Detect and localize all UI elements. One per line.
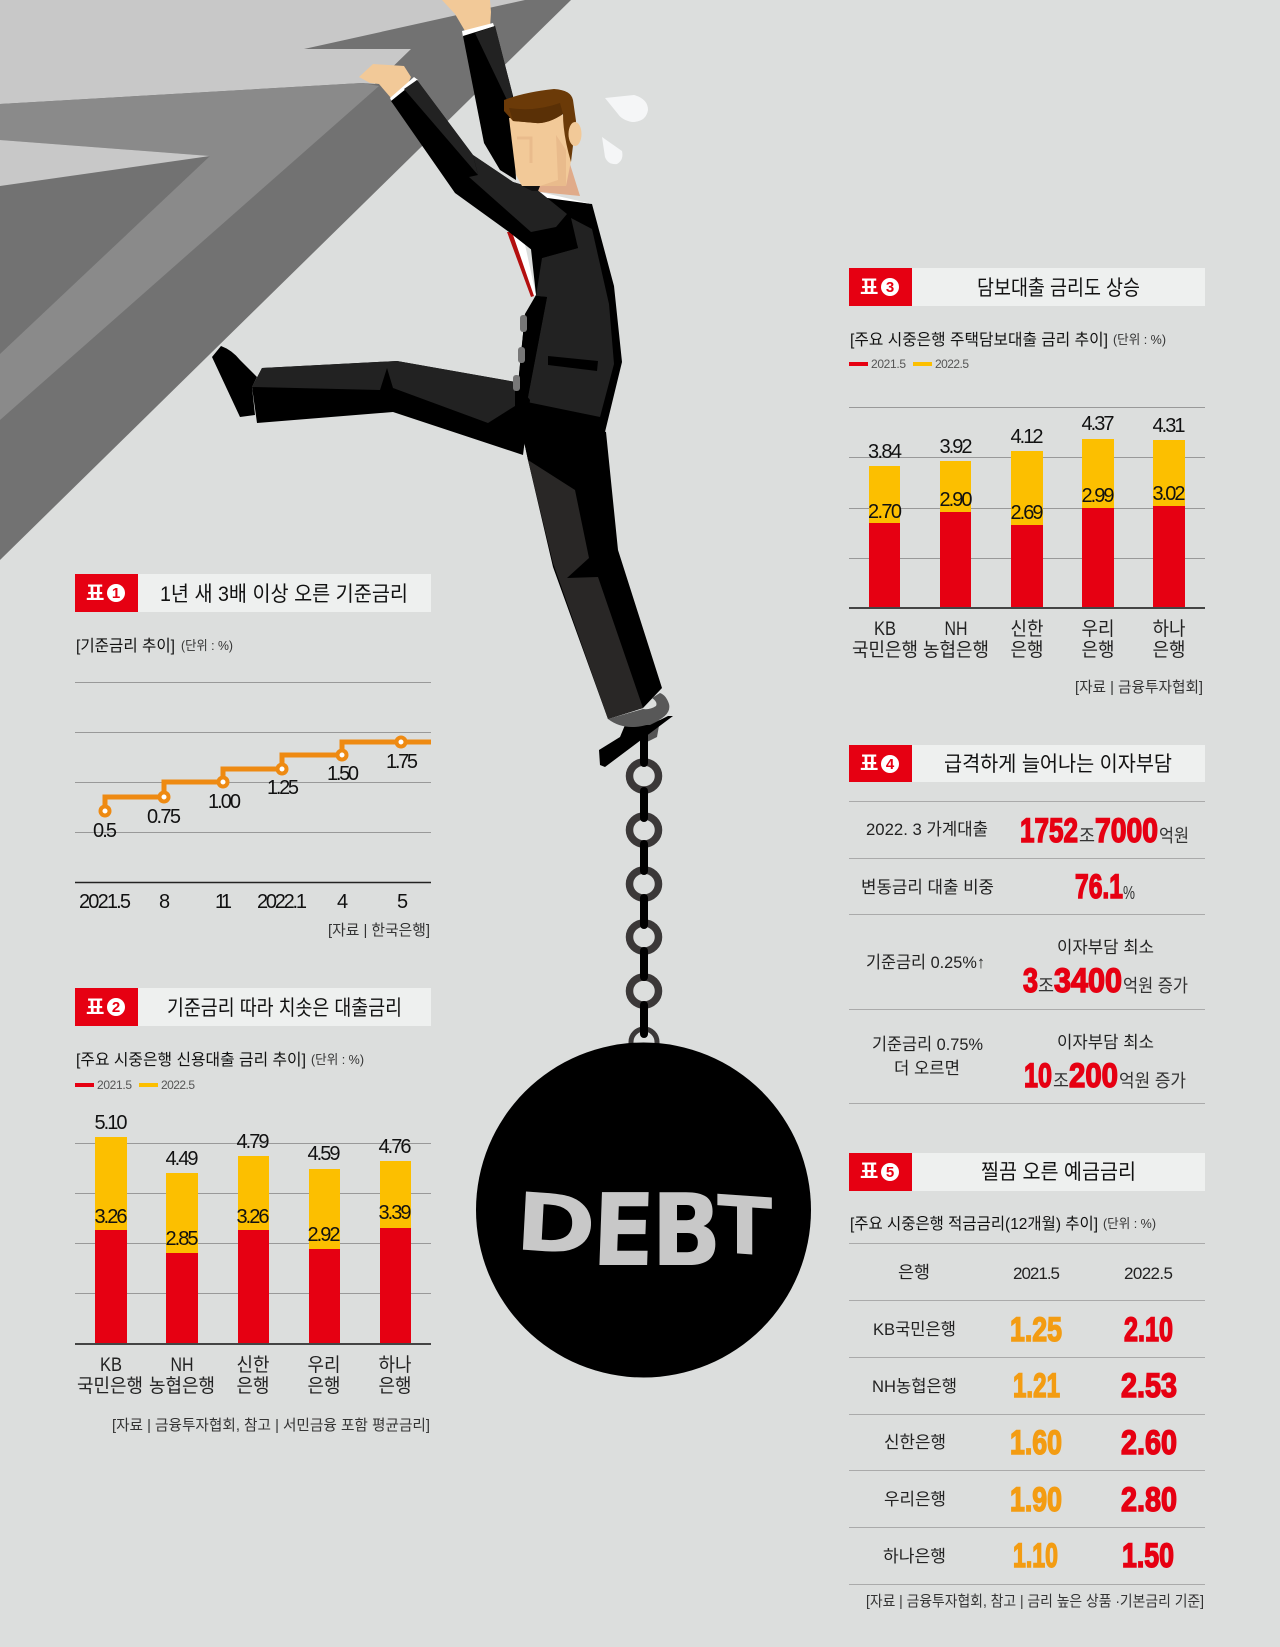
stacked bar chart: 4.49 <box>166 1148 198 1170</box>
row: household debt: 1752 <box>1020 812 1078 850</box>
illustration: businessman hanging <box>212 0 673 767</box>
subtitle: [주요 시중은행 주택담보대출 금리 추이] <box>850 331 1108 349</box>
stacked bar chart: NH <box>170 1355 194 1376</box>
stacked bar chart: 2.90 <box>940 489 972 511</box>
source: [자료 | 금융투자협회] <box>1075 679 1203 696</box>
subtitle: (단위 : %) <box>1103 1216 1156 1231</box>
stacked bar chart: 2.85 <box>166 1228 198 1250</box>
stacked bar chart: 농협은행 <box>923 639 989 661</box>
hanging leg <box>516 404 662 719</box>
stacked bar chart: 3.39 <box>378 1202 412 1224</box>
subtitle: [기준금리 추이] <box>76 637 175 655</box>
panel 4: interest burden <box>849 745 1205 1104</box>
stacked bar chart: 우리 <box>1082 618 1114 640</box>
line chart: 1.50 <box>327 763 359 785</box>
stacked bar chart: 2.69 <box>1010 502 1044 524</box>
stacked bar chart: 4.59 <box>308 1143 340 1165</box>
stacked bar chart: 은행 <box>1152 639 1186 661</box>
heading: 3 <box>886 279 894 296</box>
wrecking ball with DEBT label <box>476 1042 811 1378</box>
row: base rate up 0.75: 조 <box>1053 1071 1069 1091</box>
legend: 2021.5 <box>97 1078 132 1092</box>
line chart: 4 <box>337 891 348 913</box>
table rows: 1.50 <box>1122 1537 1174 1575</box>
stacked bar chart: 농협은행 <box>149 1375 215 1397</box>
row: base rate up 0.25: 이자부담 최소 <box>1057 938 1154 957</box>
foot, cuff and shackle <box>599 693 673 767</box>
heading: 4 <box>886 756 895 773</box>
panel 3: mortgage rates <box>849 268 1205 696</box>
table header: 2021.5 <box>1013 1264 1060 1283</box>
table rows: 1.60 <box>1010 1424 1062 1462</box>
wrecking ball with DEBT label: B <box>651 1172 722 1289</box>
heading <box>849 268 1205 306</box>
row: base rate up 0.75 <box>872 1033 1186 1095</box>
line chart: 1.00 <box>208 791 241 813</box>
stacked bar chart: 은행 <box>308 1375 340 1397</box>
stacked bar chart: 국민은행 <box>77 1375 143 1397</box>
stacked bar chart: 2.70 <box>868 501 902 523</box>
heading: 1 <box>112 585 120 602</box>
table rows: 2.10 <box>1124 1311 1173 1349</box>
heading: 기준금리 따라 치솟은 대출금리 <box>167 997 402 1020</box>
row: base rate up 0.75: 200 <box>1069 1057 1118 1095</box>
legend: 2021.5 <box>871 357 906 371</box>
table rows: 2.60 <box>1121 1424 1177 1462</box>
heading: 5 <box>886 1164 894 1181</box>
legend <box>849 357 969 371</box>
far arm <box>442 0 516 180</box>
stacked bar chart: 4.31 <box>1152 415 1186 437</box>
line chart: 11 <box>215 891 232 913</box>
table rows: NH농협은행 <box>872 1377 957 1396</box>
source: [자료 | 금융투자협회, 참고 | 서민금융 포함 평균금리] <box>112 1417 430 1434</box>
stacked bar chart: 2.99 <box>1082 485 1114 507</box>
table header <box>898 1263 1173 1283</box>
row: household debt <box>866 812 1189 850</box>
row: base rate up 0.75: 10 <box>1024 1057 1052 1095</box>
table rows: 신한은행 <box>884 1433 946 1452</box>
stacked bar chart: 3.84 <box>868 441 902 463</box>
subtitle: [주요 시중은행 적금금리(12개월) 추이] <box>850 1215 1098 1233</box>
stacked bar chart: 3.26 <box>94 1206 128 1228</box>
stacked bar chart: 4.37 <box>1082 413 1114 435</box>
stacked bar chart: 4.76 <box>378 1136 412 1158</box>
stacked bar chart: 4.79 <box>236 1131 270 1153</box>
source: [자료 | 금융투자협회, 참고 | 금리 높은 상품 ·기본금리 기준] <box>866 1593 1204 1610</box>
stacked bar chart: 은행 <box>236 1375 270 1397</box>
stacked bar chart: 은행 <box>1010 639 1044 661</box>
torso <box>507 191 622 470</box>
table header: 2022.5 <box>1124 1264 1173 1283</box>
table rows: 1.10 <box>1013 1537 1058 1575</box>
row: household debt: 조 <box>1079 826 1095 846</box>
subtitle: (단위 : %) <box>181 638 233 653</box>
head <box>504 89 582 196</box>
table rows: KB국민은행 <box>873 1320 956 1339</box>
row: variable-rate share: 76.1 <box>1075 868 1123 906</box>
stacked bar chart: 하나 <box>378 1354 412 1376</box>
row: variable-rate share <box>861 868 1135 906</box>
heading: 급격하게 늘어나는 이자부담 <box>944 753 1172 776</box>
heading: 1년 새 3배 이상 오른 기준금리 <box>160 583 408 606</box>
line chart: 8 <box>159 891 170 913</box>
wrecking ball with DEBT label: D <box>513 1175 598 1273</box>
stacked bar chart: 신한 <box>236 1354 270 1376</box>
stacked bar chart: 4.12 <box>1010 426 1044 448</box>
near arm and hand <box>359 64 578 258</box>
panel 1: base rate <box>75 574 431 939</box>
heading: 표 <box>860 753 878 775</box>
line chart: 1.75 <box>386 751 418 773</box>
row: variable-rate share: 변동금리 대출 비중 <box>861 878 994 897</box>
line chart: 0.5 <box>93 820 117 842</box>
row: base rate up 0.25: 3400 <box>1054 962 1122 1000</box>
subtitle: [주요 시중은행 신용대출 금리 추이] <box>76 1051 306 1069</box>
stacked bar chart: 우리 <box>308 1354 340 1376</box>
chain <box>630 735 658 1047</box>
row: base rate up 0.25: 3 <box>1023 962 1038 1000</box>
stacked bar chart: 신한 <box>1010 618 1044 640</box>
stacked bar chart: 국민은행 <box>852 639 918 661</box>
row: variable-rate share: % <box>1123 883 1135 903</box>
panel 2: loan rates <box>75 988 431 1434</box>
heading: 표 <box>860 1161 878 1183</box>
row: base rate up 0.25: 억원 증가 <box>1123 976 1188 996</box>
row: household debt: 억원 <box>1159 826 1189 846</box>
line chart: 0.75 <box>147 806 181 828</box>
illustration: cliff <box>0 0 571 560</box>
heading <box>75 574 431 612</box>
subtitle <box>76 637 233 655</box>
stacked bar chart: 은행 <box>1082 639 1114 661</box>
row: base rate up 0.25: 조 <box>1038 976 1054 996</box>
row: base rate up 0.75: 이자부담 최소 <box>1057 1033 1154 1052</box>
subtitle: (단위 : %) <box>311 1052 364 1067</box>
legend: 2022.5 <box>935 357 969 371</box>
stacked bar chart <box>849 408 1205 661</box>
table rows: 하나은행 <box>883 1547 946 1566</box>
heading: 표 <box>86 997 104 1019</box>
stacked bar chart: 3.92 <box>940 436 972 458</box>
line chart: 5 <box>397 891 408 913</box>
panel 5: deposit rates <box>849 1153 1205 1610</box>
table header: 은행 <box>898 1263 930 1282</box>
line chart <box>75 682 431 913</box>
stacked bar chart: NH <box>944 619 968 640</box>
heading: 표 <box>86 583 104 605</box>
heading: 찔끔 오른 예금금리 <box>981 1161 1136 1184</box>
heading: 담보대출 금리도 상승 <box>977 277 1140 300</box>
stacked bar chart: 하나 <box>1152 618 1186 640</box>
heading: 2 <box>112 999 120 1016</box>
stacked bar chart: KB <box>874 619 896 640</box>
legend: 2022.5 <box>161 1078 195 1092</box>
stacked bar chart <box>75 1112 431 1397</box>
wrecking ball with DEBT label: E <box>590 1172 657 1289</box>
heading: 표 <box>860 277 878 299</box>
stacked bar chart: 2.92 <box>308 1224 340 1246</box>
table rows <box>872 1311 1177 1575</box>
heading <box>75 988 431 1026</box>
table rows: 2.80 <box>1121 1481 1177 1519</box>
heading <box>849 1153 1205 1191</box>
line chart: 1.25 <box>267 777 299 799</box>
row: base rate up 0.25 <box>866 938 1188 1000</box>
stacked bar chart: 3.26 <box>236 1206 270 1228</box>
icon: sweat drops <box>602 95 648 164</box>
row: base rate up 0.75: 기준금리 0.75% <box>872 1035 983 1054</box>
row: base rate up 0.75: 억원 증가 <box>1119 1071 1186 1091</box>
stacked bar chart: KB <box>100 1355 122 1376</box>
row: household debt: 2022. 3 가계대출 <box>866 820 988 839</box>
source: [자료 | 한국은행] <box>328 922 430 939</box>
subtitle: (단위 : %) <box>1113 332 1166 347</box>
legend <box>75 1078 195 1092</box>
table rows: 우리은행 <box>884 1490 946 1509</box>
stacked bar chart: 은행 <box>378 1375 412 1397</box>
raised leg and shoe <box>212 346 530 455</box>
wrecking ball with DEBT label: T <box>717 1179 772 1276</box>
table rows: 1.25 <box>1010 1311 1062 1349</box>
line chart: 2021.5 <box>79 891 131 913</box>
row: household debt: 7000 <box>1095 812 1158 850</box>
jacket front edge and buttons <box>513 296 547 406</box>
stacked bar chart: 3.02 <box>1152 483 1186 505</box>
line chart: 2022.1 <box>257 891 307 913</box>
row: base rate up 0.75: 더 오르면 <box>894 1059 960 1078</box>
heading <box>849 745 1205 782</box>
table rows: 1.90 <box>1010 1481 1062 1519</box>
table rows: 1.21 <box>1013 1367 1060 1405</box>
stacked bar chart: 5.10 <box>94 1112 128 1134</box>
row: base rate up 0.25: 기준금리 0.25%↑ <box>866 953 985 972</box>
table rows: 2.53 <box>1121 1367 1177 1405</box>
